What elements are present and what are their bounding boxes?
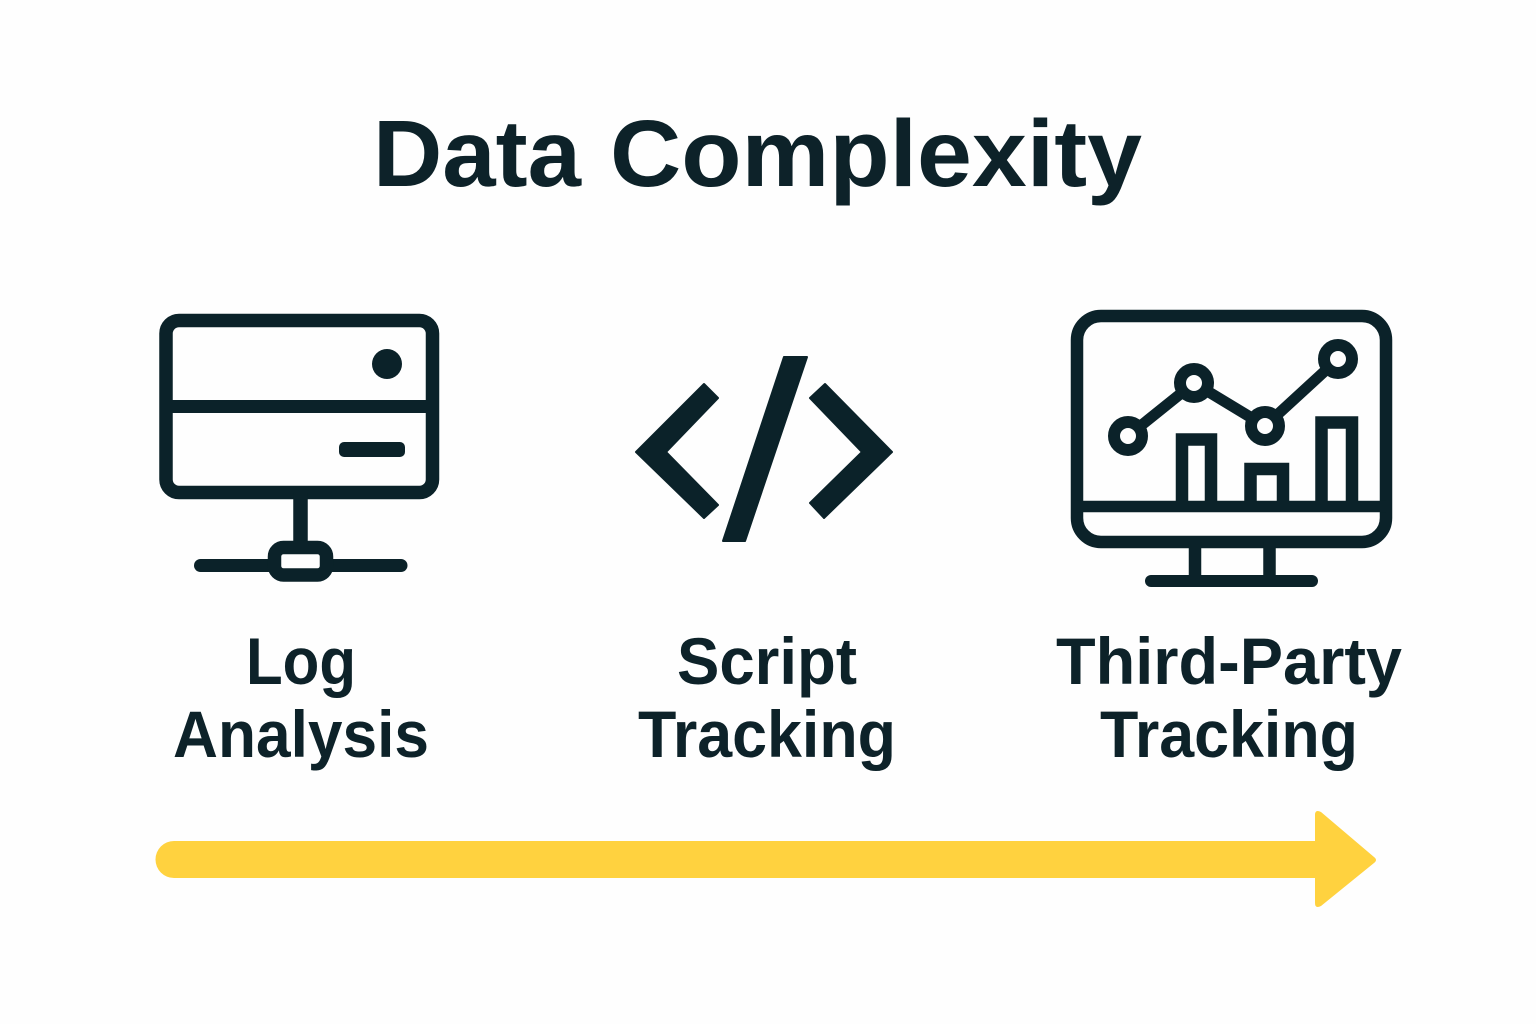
label: log analysis [173, 624, 429, 771]
arrow: increasing complexity [156, 811, 1376, 907]
title: Complexity [610, 101, 1142, 207]
icon: server network [166, 320, 432, 575]
label: log analysis: Analysis [173, 697, 429, 771]
label: script tracking [638, 624, 896, 771]
label: third-party tracking: Tracking [1100, 697, 1358, 771]
label: script tracking: Script [677, 624, 857, 698]
label: third-party tracking: Third-Party [1056, 624, 1402, 698]
icon: monitor with chart [1077, 316, 1386, 581]
label: log analysis: Log [246, 624, 356, 698]
icon: code brackets [636, 357, 892, 541]
title [373, 101, 1142, 207]
label: script tracking: Tracking [638, 697, 896, 771]
title: Data [373, 101, 582, 207]
label: third-party tracking [1056, 624, 1402, 771]
